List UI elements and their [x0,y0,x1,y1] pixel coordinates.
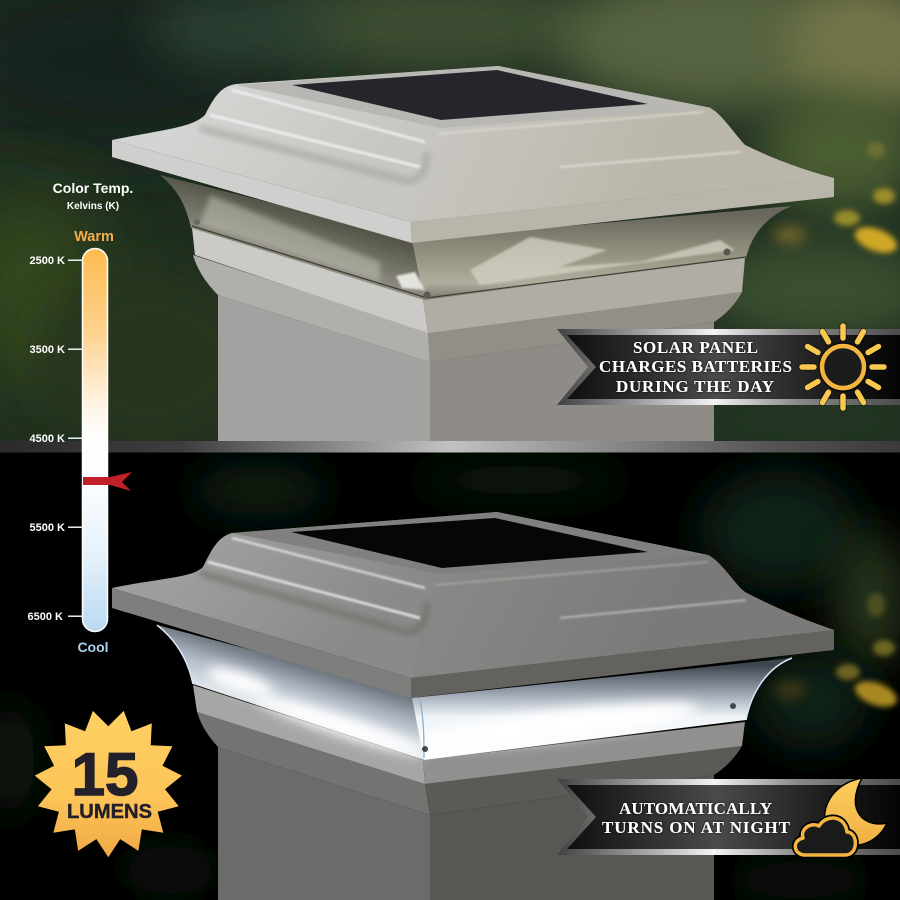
scale heading [53,180,133,212]
cool label: Cool [77,639,109,655]
scale ticks and labels: 2500 K [30,255,65,267]
cap flange and hood [112,512,834,698]
banner: solar panel charges batteries [557,329,900,405]
scale ticks and labels: 6500 K [28,611,63,623]
panel: night photo background [0,452,900,900]
banner: automatically turns on at night [557,779,900,855]
solar panel [291,518,648,568]
badge: 15 lumens: 15 [72,741,138,808]
collar [193,685,745,784]
scale ticks and labels: 3500 K [30,344,65,356]
scale ticks and labels: 4500 K [30,433,65,445]
collar [192,228,745,333]
banner: solar panel charges batteries: CHARGES BATTERIES [599,357,792,376]
post neck [197,712,742,815]
banner: solar panel charges batteries: DURING THE DAY [616,377,774,396]
gradient bar [82,248,108,632]
panel: daytime photo background [0,0,900,460]
post neck [193,255,742,362]
banner: automatically turns on at night: TURNS ON AT NIGHT [602,818,791,837]
badge: 15 lumens: LUMENS [67,801,152,823]
cap flange and hood [112,66,834,243]
scale ticks and labels [28,255,82,623]
post [218,295,714,441]
icon: sun [802,326,884,408]
divider band between day and night [0,441,900,452]
icon: moon and cloud [795,778,887,855]
post [218,747,714,900]
badge: 15 lumens [35,711,182,857]
banner: solar panel charges batteries: SOLAR PANEL [633,338,758,357]
illustration: night solar post cap lit [112,512,834,900]
illustration: daytime solar post cap [112,66,834,441]
color temperature scale [28,180,133,655]
scale heading: Color Temp. [53,180,133,196]
warm label: Warm [74,229,114,245]
illuminated glass lens [157,625,792,762]
scale ticks and labels: 5500 K [30,522,65,534]
red marker arrow [83,472,132,491]
solar panel [292,70,648,120]
clear glass lens [160,175,792,300]
banner: automatically turns on at night: AUTOMATICALLY [619,799,772,818]
scale heading: Kelvins (K) [67,201,119,212]
